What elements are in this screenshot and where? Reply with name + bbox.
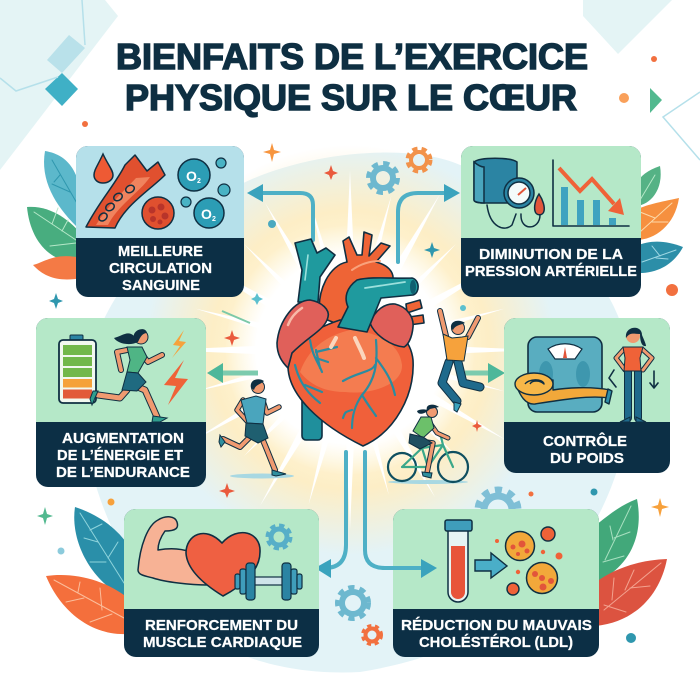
label (109, 243, 212, 294)
label: DIMINUTION DE LA (479, 246, 623, 263)
label (143, 617, 302, 651)
label: CIRCULATION (109, 260, 212, 277)
icon: arrow (475, 553, 507, 578)
icon: oxygen bubble large: 2 (197, 178, 201, 185)
title (116, 36, 588, 118)
title: PHYSIQUE SUR LE CŒUR (125, 77, 577, 118)
icon: running woman (90, 329, 167, 422)
figure: cyclist (388, 405, 468, 484)
central heart (277, 232, 424, 446)
icon: oxygen bubble lower (194, 198, 224, 228)
icon: dumbbell (235, 563, 302, 600)
panel: meilleure circulation sanguine (76, 146, 244, 297)
arrow: to cholesterol (365, 452, 437, 578)
label (543, 432, 627, 467)
title: BIENFAITS DE L’EXERCICE (116, 36, 588, 77)
icon: scale (528, 337, 602, 412)
label (401, 617, 592, 651)
decorative dots and sparkles (37, 143, 678, 643)
arrow: to pression (398, 184, 460, 262)
gear: lower right blue (478, 490, 518, 530)
arrow: to energie (207, 363, 258, 383)
label: DU POIDS (550, 450, 624, 467)
icon: oxygen bubble large (178, 159, 210, 191)
leaves: panel pression (636, 166, 683, 273)
icon: oxygen bubble lower: O (201, 206, 212, 222)
gear: bottom centre blue (338, 588, 368, 618)
icon: cholesterol particles (495, 527, 562, 595)
label: MEILLEURE (118, 243, 203, 260)
label: AUGMENTATION (62, 430, 184, 447)
icon: blood drop (94, 154, 113, 183)
icon: red blood cell (142, 197, 174, 229)
arrow: to poids (465, 363, 505, 383)
label: CONTRÔLE (543, 432, 627, 450)
leaves: panel circulation (27, 151, 82, 279)
label: MUSCLE CARDIAQUE (143, 634, 302, 651)
icon: blood pressure cuff and gauge (474, 158, 544, 228)
label (56, 430, 190, 481)
gear: bottom centre orange (363, 626, 381, 644)
icon: heart (186, 533, 260, 596)
background decoration: top right shapes (583, 0, 700, 160)
label: DE L’ÉNERGIE ET (57, 447, 183, 464)
icon: oxygen bubble lower: 2 (212, 216, 216, 223)
gear: top centre blue (369, 164, 397, 192)
label (465, 246, 637, 280)
label: PRESSION ARTÉRIELLE (465, 263, 637, 280)
icon: woman with arrows (609, 328, 658, 422)
label: RÉDUCTION DU MAUVAIS (401, 617, 592, 634)
sunburst glow (145, 145, 555, 555)
panel: renforcement du muscle cardiaque (124, 509, 319, 657)
icon: flexed arm (138, 517, 208, 585)
icon: gear (268, 526, 290, 548)
icon: battery (59, 335, 96, 403)
panel: diminution de la pression arterielle (461, 146, 641, 297)
icon: oxygen bubble large: O (186, 168, 197, 184)
label: DE L’ENDURANCE (56, 464, 190, 481)
arrow: to circulation (247, 184, 313, 240)
panel: controle du poids (504, 318, 670, 473)
background blob (83, 153, 631, 672)
gear: top centre orange (408, 149, 430, 171)
icon: test tube (445, 520, 472, 602)
icon: red lightning (164, 360, 188, 405)
background decoration: top left shapes (0, 0, 118, 170)
leaves: panel renforcement (46, 507, 128, 634)
figure: jumping person (440, 311, 480, 412)
icon: artery (86, 155, 165, 228)
icon: small bubbles (181, 158, 230, 207)
leaves: panel cholesterol (596, 499, 667, 626)
label: CHOLÉSTÉROL (LDL) (419, 634, 573, 651)
label: SANGUINE (122, 277, 200, 294)
icon: orange lightning (172, 330, 186, 358)
panel: reduction du mauvais cholesterol (393, 509, 599, 657)
panel: augmentation de l'energie (36, 318, 206, 487)
icon: measuring tape (515, 373, 612, 404)
chart: falling bars (553, 160, 629, 226)
arrow: into panel (393, 559, 437, 578)
label: RENFORCEMENT DU (145, 617, 298, 634)
figure: male runner (219, 379, 294, 478)
arrow: to renforcement (315, 452, 346, 578)
